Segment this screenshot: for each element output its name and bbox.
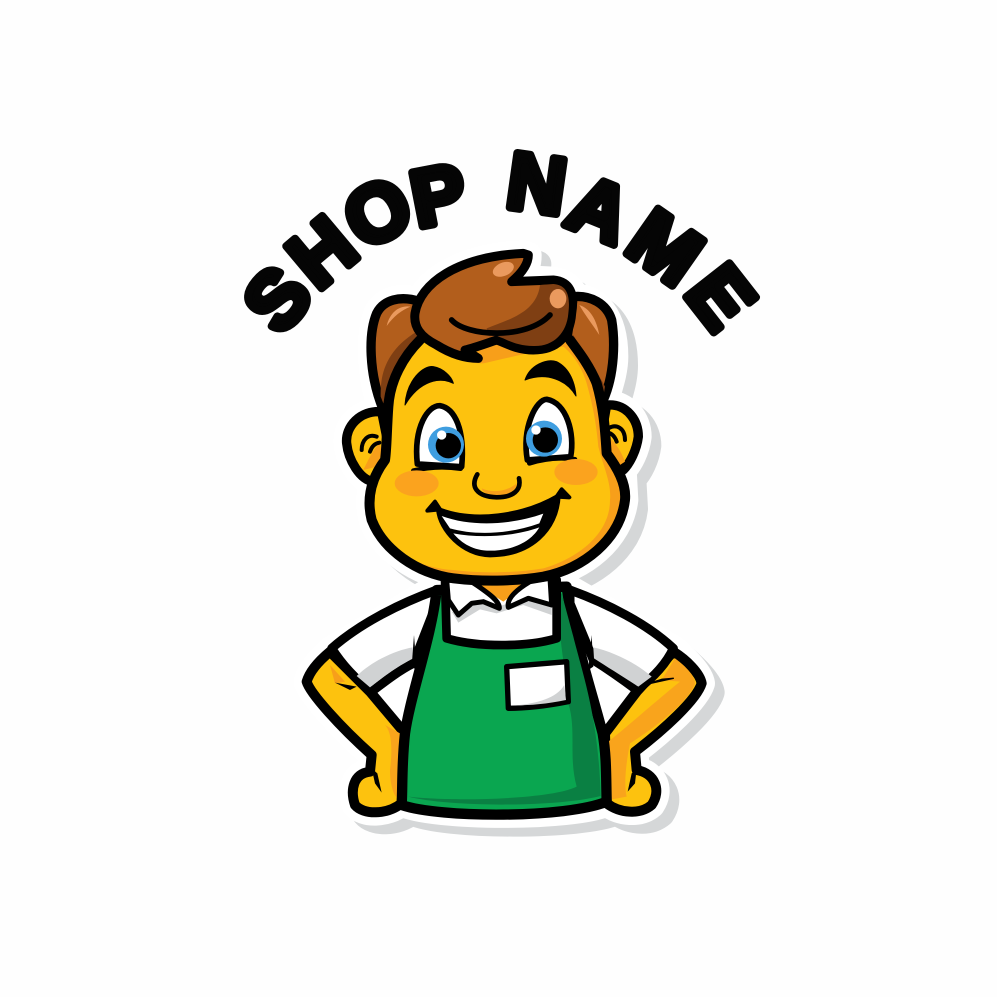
title: curved shop name: A <box>556 157 643 261</box>
sticker gray drop shadow <box>317 262 712 824</box>
right cheek <box>554 459 598 485</box>
character head <box>347 253 638 581</box>
sticker white border <box>307 253 702 815</box>
top hair <box>415 253 573 358</box>
left back hair <box>371 299 427 410</box>
left sleeve <box>332 590 437 692</box>
title: curved shop name: E <box>669 249 772 345</box>
left eye <box>413 406 464 471</box>
right sleeve <box>570 590 673 690</box>
right collar <box>508 578 552 607</box>
title: curved shop name: N <box>502 135 572 232</box>
character body <box>307 577 702 815</box>
shirt front panel <box>445 580 557 645</box>
right eyebrow <box>525 361 576 396</box>
right back hair <box>567 296 614 400</box>
left eyebrow <box>405 367 453 405</box>
title: curved shop name <box>226 135 772 348</box>
left ear <box>347 412 390 482</box>
apron pocket <box>507 662 568 708</box>
right ear <box>600 405 638 470</box>
smile <box>427 489 569 555</box>
right eye <box>526 399 575 463</box>
title: curved shop name: M <box>612 192 718 303</box>
left arm <box>307 652 405 812</box>
left cheek <box>395 470 439 496</box>
face <box>369 340 625 581</box>
title: curved shop name: S <box>226 250 328 348</box>
apron <box>402 587 607 815</box>
left collar <box>447 580 499 615</box>
title: curved shop name: P <box>404 147 473 244</box>
nose <box>474 474 519 497</box>
title: curved shop name: O <box>329 158 426 266</box>
neck in collar <box>472 582 530 602</box>
right arm <box>605 652 702 812</box>
title: curved shop name: H <box>271 199 373 305</box>
neck <box>467 577 533 603</box>
